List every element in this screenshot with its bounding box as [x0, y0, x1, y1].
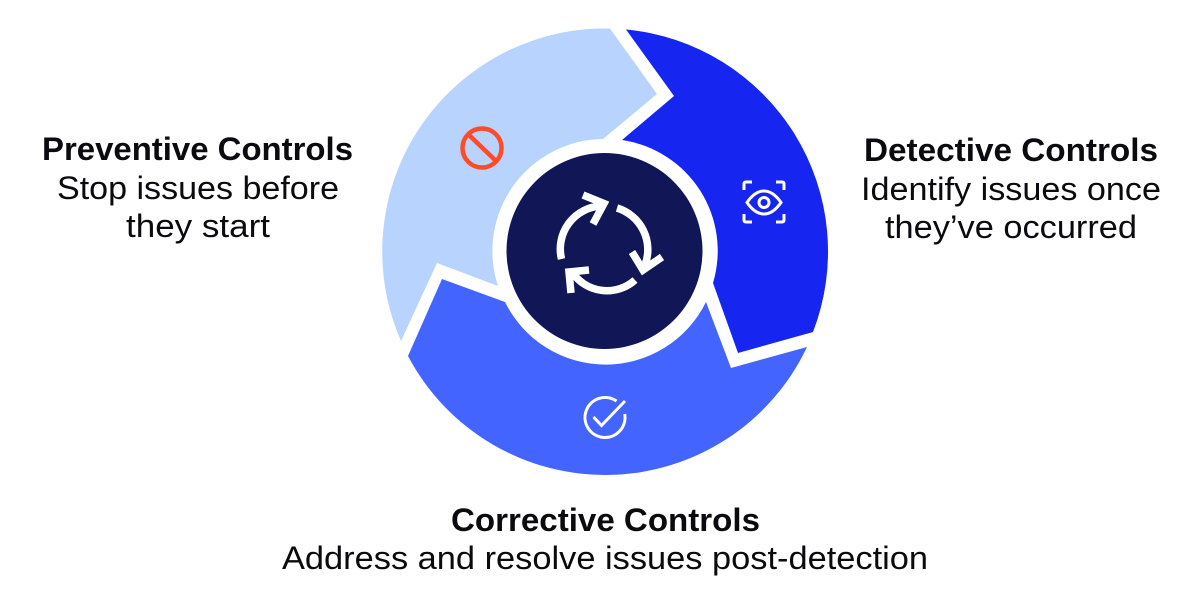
segment: preventive (light blue): [382, 28, 657, 341]
label: corrective controls: Corrective Controls: [451, 502, 760, 538]
icon: refresh cycle arrows: [560, 195, 662, 293]
label: corrective controls: [282, 502, 928, 576]
label: detective controls: [861, 132, 1161, 245]
label: preventive controls: they start: [126, 208, 270, 244]
center hub: [506, 153, 702, 349]
segment: corrective (mid blue): [408, 279, 807, 475]
label: preventive controls: Preventive Controls: [42, 131, 353, 167]
label: corrective controls: Address and resolve issues post-detection: [282, 540, 928, 576]
segment: detective (deep blue): [622, 30, 828, 353]
label: preventive controls: Stop issues before: [57, 170, 339, 206]
icon: check mark in circle: [585, 397, 625, 437]
label: detective controls: Detective Controls: [864, 132, 1158, 168]
cycle diagram: [382, 28, 828, 475]
label: detective controls: Identify issues once: [861, 171, 1161, 207]
label: detective controls: they’ve occurred: [885, 209, 1137, 245]
icon: prohibited sign: [462, 128, 502, 168]
icon: eye in focus frame: [744, 182, 784, 222]
label: preventive controls: [42, 131, 353, 244]
